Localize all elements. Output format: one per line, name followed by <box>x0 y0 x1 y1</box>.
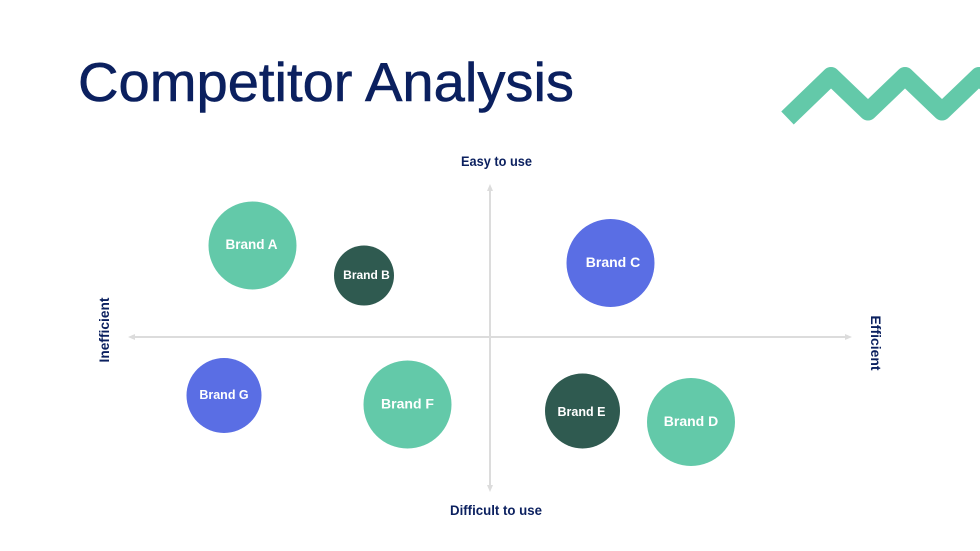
bubble: Brand B <box>334 246 394 306</box>
axis label: top: Easy to use <box>461 153 532 169</box>
bubble: Brand F <box>364 360 452 448</box>
bubble: Brand F: Brand F <box>381 396 434 412</box>
axis label: right: Efficient <box>868 316 884 371</box>
bubble: Brand G: Brand G <box>199 388 249 402</box>
bubble: Brand E <box>545 374 620 448</box>
bubble: Brand D: Brand D <box>664 413 718 429</box>
bubble: Brand G <box>186 358 262 433</box>
bubble: Brand C: Brand C <box>586 254 640 270</box>
bubble: Brand D <box>647 378 735 466</box>
bubble: Brand A <box>208 202 296 290</box>
bubble: Brand A: Brand A <box>225 237 278 252</box>
axis label: bottom: Difficult to use <box>450 502 542 518</box>
vertical axis arrow <box>487 184 493 492</box>
title: Competitor Analysis <box>78 51 574 113</box>
bubble: Brand C <box>566 219 654 307</box>
icon: green zigzag decoration <box>788 76 980 118</box>
axis label: left: Inefficient <box>96 297 112 362</box>
horizontal axis arrow <box>128 334 852 340</box>
bubble: Brand E: Brand E <box>558 405 605 419</box>
bubble: Brand B: Brand B <box>343 268 390 282</box>
